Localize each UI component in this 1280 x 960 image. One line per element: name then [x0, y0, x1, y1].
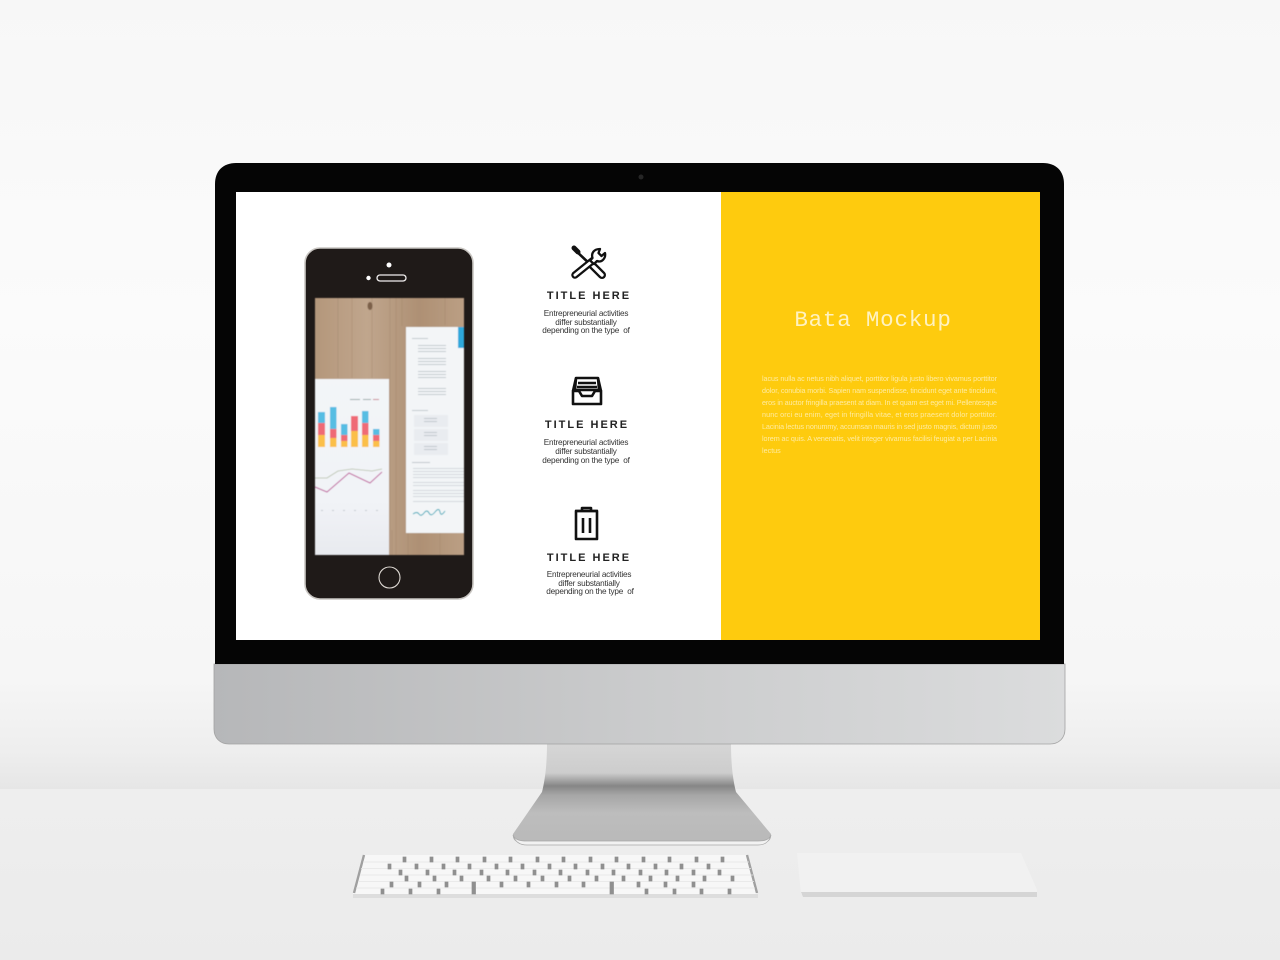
- phone speaker: [377, 275, 406, 281]
- description: differ substantially: [558, 579, 621, 588]
- phone sensor: [366, 276, 371, 280]
- body text: dolor, conubia morbi. Sapien nam suspendisse, tincidunt eget ante tincidunt,: [762, 386, 997, 395]
- icon: wrench and screwdriver: [574, 248, 605, 275]
- description: depending on the type of: [542, 326, 631, 335]
- description: Entrepreneurial activities: [544, 438, 628, 447]
- description: depending on the type of: [542, 456, 631, 465]
- title: TITLE HERE: [547, 290, 631, 302]
- body text: eros in auctor fringilla praesent at diam. In et quam est eget mi. Pellentesque: [762, 398, 997, 407]
- monitor stand: [513, 743, 771, 845]
- icon: trash can: [575, 508, 598, 539]
- description: depending on the type of: [546, 587, 635, 596]
- webcam: [638, 174, 644, 180]
- screen: [236, 192, 721, 640]
- feature 1: tools: [542, 248, 631, 335]
- title: TITLE HERE: [545, 419, 629, 431]
- body text: nunc orci eu enim, eget in fringilla vitae, et eros praesent dolor porttitor.: [762, 410, 997, 419]
- resume paper: [406, 327, 464, 533]
- body text: lorem ac quis. A venenatis, velit integer vivamus facilisi feugiat a per Lacinia: [762, 434, 997, 443]
- description: [542, 438, 631, 465]
- body text: lacus nulla ac netus nibh aliquet, porttitor ligula justo libero vivamus porttitor: [762, 374, 998, 383]
- feature 2: inbox tray: [542, 378, 631, 465]
- keyboard: [353, 855, 758, 898]
- description: differ substantially: [555, 447, 618, 456]
- monitor chin: [214, 664, 1065, 744]
- title: TITLE HERE: [547, 552, 631, 564]
- icon: inbox tray: [573, 378, 601, 404]
- body text: Lacinia lectus nonummy, accumsan mauris in sed justo magnis, dictum justo: [762, 422, 997, 431]
- phone body: [305, 248, 473, 599]
- body text: lectus: [762, 446, 781, 455]
- description: [546, 570, 635, 596]
- body text: [762, 374, 998, 455]
- yellow panel: [721, 192, 1040, 640]
- description: Entrepreneurial activities: [544, 309, 628, 318]
- description: [542, 309, 631, 335]
- heading: Bata Mockup: Bata Mockup: [794, 307, 952, 333]
- feature 3: trash can: [546, 508, 635, 596]
- description: Entrepreneurial activities: [547, 570, 631, 579]
- monitor: [214, 163, 1065, 744]
- phone mockup: [305, 248, 473, 599]
- phone camera: [386, 262, 392, 268]
- chart paper: [315, 379, 389, 555]
- trackpad: [797, 853, 1037, 897]
- description: differ substantially: [555, 318, 618, 327]
- monitor bezel: [215, 163, 1064, 664]
- phone screen photo: [315, 298, 464, 555]
- phone home button: [379, 567, 400, 588]
